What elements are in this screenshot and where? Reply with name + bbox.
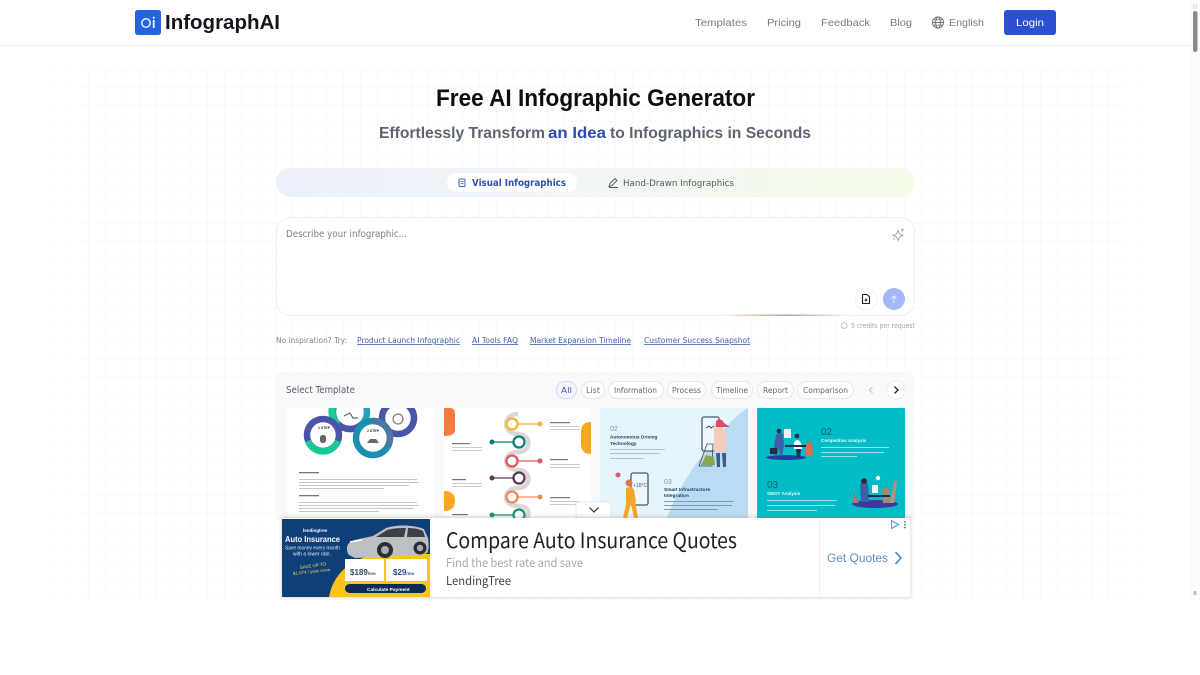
icon: sparkle <box>893 228 904 240</box>
category filter pills: Process <box>672 385 701 395</box>
navigation links <box>695 17 912 29</box>
ad collapse tab <box>576 502 611 518</box>
subtitle <box>379 125 811 142</box>
style tabs <box>276 168 915 197</box>
carousel next arrow <box>887 381 905 399</box>
ad advertiser: LendingTree <box>446 572 511 589</box>
subtitle: an Idea <box>548 125 606 142</box>
category filter pills: List <box>586 385 601 395</box>
ad headline: Compare Auto Insurance Quotes <box>446 525 737 555</box>
ad image: auto insurance <box>282 519 430 597</box>
price boxes: $189/mo <box>350 568 376 577</box>
template card 1: circle steps: 1 STEP <box>318 426 331 430</box>
price boxes <box>345 559 427 581</box>
inspiration links: Product Launch Infographic <box>357 336 460 345</box>
template card 3: smart mobility <box>600 408 748 518</box>
template card 2: winding timeline <box>444 408 591 522</box>
logo: InfographAI <box>165 12 280 34</box>
category filter pills: Report <box>763 385 789 395</box>
template card 4: competitive analysis: Competitive Analysis <box>821 438 867 443</box>
template card 3: smart mobility: Technology <box>610 441 637 447</box>
background grid <box>25 65 1175 600</box>
navigation links: Feedback <box>821 17 871 29</box>
scrollbar <box>1190 0 1200 600</box>
login button: Login <box>1016 17 1044 29</box>
header bar <box>0 0 1190 46</box>
active tab: visual infographics: Visual Infographics <box>472 178 566 189</box>
template card 4: competitive analysis: 02 <box>821 427 833 438</box>
price boxes: $29/mo <box>393 568 415 577</box>
category filter pills: Information <box>614 385 657 395</box>
template card 4: competitive analysis <box>757 408 905 518</box>
subtitle: Effortlessly Transform <box>379 125 545 142</box>
inspiration links: AI Tools FAQ <box>472 336 518 345</box>
language selector: English <box>949 17 984 29</box>
navigation links: Blog <box>890 17 912 29</box>
template card 1: circle steps <box>299 408 419 512</box>
ad choices icon <box>892 520 906 528</box>
ad image: auto insurance: Auto Insurance <box>285 535 341 544</box>
active tab: visual infographics <box>447 173 577 192</box>
subtitle: to Infographics in Seconds <box>610 125 811 142</box>
attach file button <box>855 288 877 310</box>
template card 3: smart mobility: 03 <box>664 479 672 486</box>
ad image: auto insurance: $1,074 / year more <box>293 567 331 576</box>
category filter pills: All <box>561 385 572 395</box>
send button <box>883 288 905 310</box>
template card 3: smart mobility: Integration <box>664 493 689 499</box>
category filter pills: Timeline <box>715 385 748 395</box>
panel: template selector <box>286 380 906 518</box>
ad image: auto insurance: Save money every month <box>285 546 340 552</box>
ad description: Find the best rate and save <box>446 554 583 571</box>
ad image: auto insurance: lendingtree <box>303 528 328 533</box>
category filter pills <box>556 382 854 398</box>
logo <box>135 10 280 35</box>
template card 4: competitive analysis: 03 <box>767 480 779 491</box>
template card 3: smart mobility: Smart Infrastructure <box>664 487 710 493</box>
template card 3: smart mobility: 02 <box>610 426 618 433</box>
inspiration links <box>276 336 750 345</box>
template card 3: smart mobility: +18°C <box>633 483 647 489</box>
ad image: auto insurance: with a lower rate. <box>293 552 331 558</box>
inspiration links: No inspiration? Try: <box>276 336 347 345</box>
carousel previous arrow <box>870 387 872 393</box>
tab: hand-drawn infographics: Hand-Drawn Infographics <box>623 179 734 189</box>
car <box>347 525 429 558</box>
advertisement banner <box>281 516 911 598</box>
placeholder text: Describe your infographic... <box>286 229 407 240</box>
prompt input box <box>276 218 914 316</box>
login button <box>1004 10 1056 35</box>
calculate payment button <box>345 584 426 593</box>
panel heading: Select Template <box>286 385 355 396</box>
template card 3: smart mobility: Autonomous Driving <box>610 434 658 440</box>
template card 4: competitive analysis: SWOT Analysis <box>767 491 801 496</box>
inspiration links: Market Expansion Timeline <box>530 336 631 345</box>
ad image: auto insurance: SAVE UP TO <box>299 561 327 570</box>
navigation links: Templates <box>695 17 747 29</box>
inspiration links: Customer Success Snapshot <box>644 336 750 345</box>
template card 1: circle steps: 2 STEP <box>367 429 380 433</box>
calculate payment button: Calculate Payment <box>367 587 410 593</box>
ad call to action: Get Quotes <box>827 551 888 565</box>
navigation links: Pricing <box>767 17 801 29</box>
credits note: 5 credits per request <box>851 322 915 330</box>
category filter pills: Comparison <box>803 385 848 395</box>
title: Free AI Infographic Generator <box>436 85 755 112</box>
language selector <box>932 17 984 29</box>
